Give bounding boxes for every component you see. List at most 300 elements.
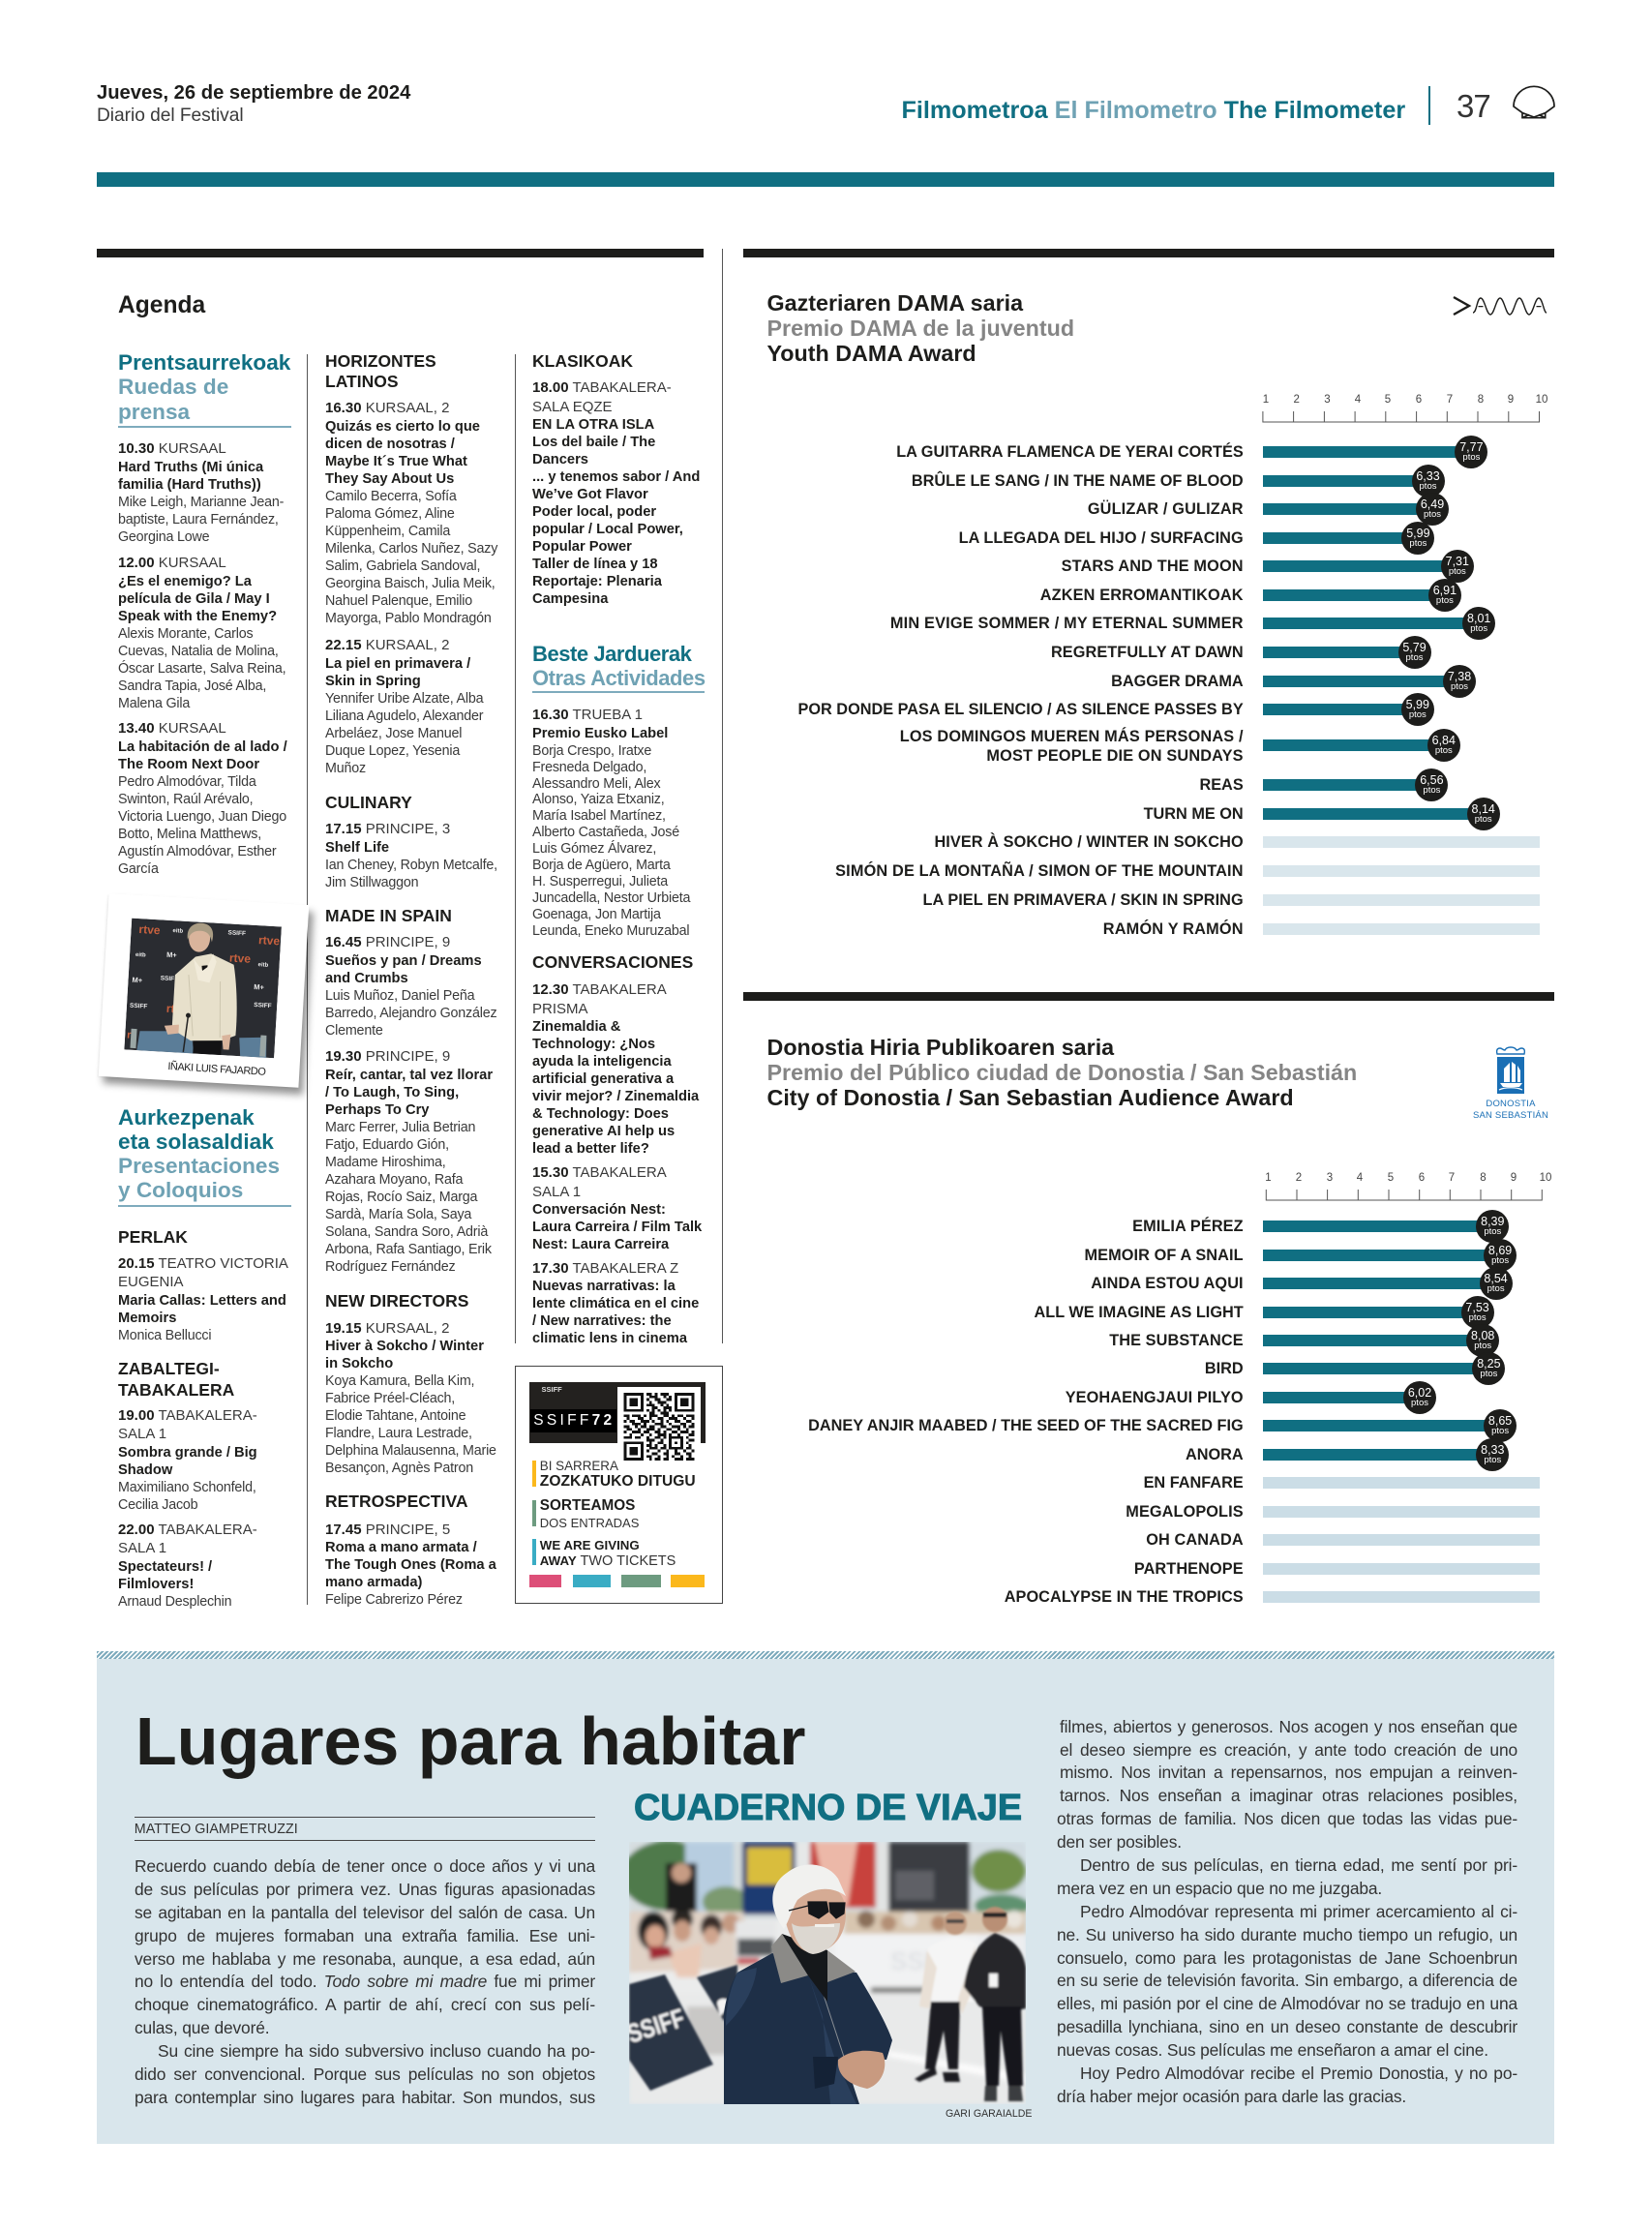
row: Regretfully at dawn: ptos <box>1406 652 1423 663</box>
agenda entry: 12.00: Sandra Tapia, José Alba, <box>118 678 266 694</box>
column separators <box>307 354 516 1605</box>
agenda entry: eusko label: Premio Eusko Label <box>532 726 668 741</box>
agenda entry: 19.15: in Sokcho <box>325 1356 393 1371</box>
agenda entry: 17.30: climatic lens in cinema <box>532 1331 687 1346</box>
agenda entry: 17.15: Shelf Life <box>325 840 389 856</box>
agenda entry: 16.30: Paloma Gómez, Aline <box>325 506 455 522</box>
article text column 1 <box>135 1855 595 2110</box>
agenda entry: 16.45: 16.45 PRINCIPE, 9 <box>325 934 450 950</box>
row: Regretfully at dawn <box>755 636 1554 669</box>
row: La guitarra flamenca: 7,77 <box>1459 440 1484 454</box>
agenda entry: 16.30: Salim, Gabriela Sandoval, <box>325 558 480 574</box>
chart axis: 5 <box>1388 1172 1394 1184</box>
agenda entry: 13.40: Agustín Almodóvar, Esther <box>118 844 276 859</box>
agenda entry: eusko label <box>532 707 691 939</box>
row: Emilia Pérez: 8,39 <box>1481 1215 1504 1228</box>
photo: woman at press wall: M+ <box>254 982 264 991</box>
photo: woman at press wall: SSIFF <box>254 1002 271 1010</box>
colour swatches <box>529 1575 705 1587</box>
agenda entry: 18.00: 18.00 TABAKALERA- <box>532 379 672 396</box>
heading: presentations <box>118 1105 280 1202</box>
agenda entry: 19.30: Reír, cantar, tal vez llorar <box>325 1068 493 1083</box>
agenda entry: 20.15 <box>118 1255 288 1343</box>
row: Megalopolis: MEGALOPOLIS <box>1126 1503 1244 1521</box>
photo: woman at press wall: SSIFF <box>129 1002 147 1010</box>
row: Ainda estou aqui: ptos <box>1487 1283 1505 1294</box>
agenda entry: 19.30: Azahara Moyano, Rafa <box>325 1172 463 1188</box>
agenda entry: 19.15: Koya Kamura, Bella Kim, <box>325 1373 474 1389</box>
article text column 1: Recuerdo cuando debía de tener once o doce años y vi una <box>135 1856 595 1876</box>
row: Turn me on: TURN ME ON <box>1144 805 1244 823</box>
row: Ainda estou aqui: AINDA ESTOU AQUI <box>1091 1275 1244 1292</box>
article text column 2: otras formas de familia. Nos dicen que todas las vidas pue- <box>1057 1809 1517 1828</box>
agenda entry: 12.30: PRISMA <box>532 1001 588 1017</box>
agenda entry: 17.45 <box>325 1522 496 1608</box>
row: Turn me on: ptos <box>1475 814 1492 825</box>
hands <box>838 2051 885 2089</box>
row: Los domingos mueren más personas: ptos <box>1435 745 1453 756</box>
agenda entry: 16.30: Mayorga, Pablo Mondragón <box>325 611 492 626</box>
agenda entry: eusko label: Leunda, Eneko Muruzabal <box>532 923 689 939</box>
white hair <box>772 1864 846 1929</box>
agenda entry: 19.00: Sombra grande / Big <box>118 1444 257 1460</box>
agenda entry: 16.30: Küppenheim, Camila <box>325 524 450 539</box>
article headline: Lugares para habitar <box>135 1703 805 1779</box>
agenda entry: 19.30: Solana, Sandra Soro, Adrià <box>325 1224 488 1240</box>
agenda heading: Agenda <box>118 292 205 317</box>
chart axis: 3 <box>1324 394 1331 406</box>
row: All we imagine as light <box>755 1296 1554 1329</box>
agenda entry: 18.00: Dancers <box>532 452 588 467</box>
callout: ticket giveaway <box>515 1366 723 1604</box>
row: Azken erromantikoak: AZKEN ERROMANTIKOAK <box>1040 587 1244 604</box>
agenda entry: 20.15: EUGENIA <box>118 1274 184 1290</box>
agenda entry: 13.40: Victoria Luengo, Juan Diego <box>118 809 286 825</box>
award title <box>766 290 1074 366</box>
article text column 2: dría haber mejor ocasión para darle las gracias. <box>1057 2087 1406 2106</box>
article text column 2: Hoy Pedro Almodóvar recibe el Premio Donostia, y no po- <box>1080 2064 1517 2083</box>
agenda entry: 19.30: Arbona, Rafa Santiago, Erik <box>325 1242 492 1257</box>
heading: made in spain: MADE IN SPAIN <box>325 906 452 925</box>
heading: other activities <box>532 641 706 690</box>
row: Brûle le sang: BRÛLE LE SANG / IN THE NAME OF BLOOD <box>912 472 1244 490</box>
row: Ainda estou aqui: 8,54 <box>1484 1272 1508 1285</box>
row: Min evige sommer: MIN EVIGE SOMMER / MY ETERNAL SUMMER <box>890 615 1244 632</box>
row: Min evige sommer: ptos <box>1470 623 1487 634</box>
agenda entry: 22.00: SALA 1 <box>118 1540 166 1556</box>
barrier with SSIFF <box>624 1965 737 2091</box>
photo credit: GARI GARAIALDE <box>946 2108 1032 2120</box>
turtleneck <box>782 1934 827 2002</box>
row: Regretfully at dawn: 5,79 <box>1402 641 1427 654</box>
agenda entry: 19.00: Maximiliano Schonfeld, <box>118 1479 256 1494</box>
agenda entry: 16.30: Maybe It´s True What <box>325 454 467 469</box>
article text column 1: de sus películas por primera vez. Unas figuras apasionadas <box>135 1880 595 1899</box>
panel: article Lugares para habitar <box>97 1651 1554 2144</box>
row: Stars and the moon: ptos <box>1449 566 1466 577</box>
row: La llegada del hijo: 5,99 <box>1406 527 1430 540</box>
row: All we imagine as light: ptos <box>1469 1312 1487 1323</box>
agenda entry: 13.40: La habitación de al lado / <box>118 739 287 755</box>
photo: woman at press wall: eitb <box>135 951 146 958</box>
agenda entry: eusko label: Borja de Agüero, Marta <box>532 858 671 873</box>
row: Bird <box>755 1352 1554 1385</box>
ssiff 72 label <box>530 1409 616 1432</box>
agenda entry: 22.15 <box>325 637 484 776</box>
heading: other activities: Beste Jarduerak <box>532 641 691 666</box>
agenda entry: 19.30: Fatjo, Eduardo Gión, <box>325 1137 449 1153</box>
row: En fanfare <box>755 1466 1554 1499</box>
agenda entry: 16.30: Camilo Becerra, Sofía <box>325 489 457 504</box>
agenda entry: 12.30: lead a better life? <box>532 1141 649 1157</box>
heading: presentations: Aurkezpenak <box>118 1105 255 1130</box>
page header <box>97 82 1555 187</box>
heading: new directors: NEW DIRECTORS <box>325 1291 468 1311</box>
agenda entry: 16.30: Milenka, Carlos Nuñez, Sazy <box>325 541 497 557</box>
agenda entry: 10.30: baptiste, Laura Fernández, <box>118 512 279 527</box>
agenda entry: 16.45: and Crumbs <box>325 970 408 985</box>
article text column 2: Dentro de sus películas, en tierna edad, me sentí por pri- <box>1080 1855 1517 1875</box>
row: La guitarra flamenca: ptos <box>1462 452 1480 463</box>
heading: other activities: Otras Actividades <box>532 666 706 690</box>
chart axis: 7 <box>1449 1172 1455 1184</box>
agenda entry: 12.30: vivir mejor? / Zinemaldia <box>532 1089 699 1104</box>
dark banner <box>528 1382 705 1443</box>
agenda entry: 13.40: Pedro Almodóvar, Tilda <box>118 774 256 790</box>
page number: 37 <box>1457 88 1490 124</box>
agenda entry: 13.40: 13.40 KURSAAL <box>118 720 226 737</box>
heading: conversaciones: CONVERSACIONES <box>532 952 693 972</box>
article text column 2 <box>1057 1716 1517 2109</box>
chart axis: 3 <box>1327 1172 1333 1184</box>
chart axis: 6 <box>1419 1172 1425 1184</box>
photo credit: IÑAKI LUIS FAJARDO <box>167 1061 265 1078</box>
agenda entry: 18.00: Taller de línea y 18 <box>532 557 658 572</box>
agenda entry: 18.00 <box>532 379 700 607</box>
rule under presentations <box>118 1204 290 1206</box>
agenda entry: 16.30 <box>325 400 497 626</box>
green tab <box>532 1500 536 1526</box>
row: Brûle le sang <box>755 465 1554 497</box>
agenda entry: 12.30: generative AI help us <box>532 1124 675 1139</box>
agenda entry: 12.30: 12.30 TABAKALERA <box>532 981 667 998</box>
jacket <box>724 1953 892 2104</box>
row: Hiver à Sokcho <box>755 826 1554 859</box>
heading: presentations: Presentaciones <box>118 1154 280 1178</box>
row: Anora <box>755 1438 1554 1471</box>
agenda entry: 19.15: Besançon, Agnès Patron <box>325 1461 473 1476</box>
row: Apocalypse in the tropics <box>755 1581 1554 1613</box>
agenda entry: 19.30: Rodríguez Fernández <box>325 1259 455 1275</box>
row: Anora: ptos <box>1484 1455 1501 1465</box>
row: Ramón y Ramón <box>755 913 1554 946</box>
spanish text: SORTEAMOS <box>540 1497 635 1514</box>
date: Jueves, 26 de septiembre de 2024 <box>97 82 410 104</box>
agenda entry: 12.00: Speak with the Enemy? <box>118 609 277 624</box>
agenda entry: 19.15: 19.15 KURSAAL, 2 <box>325 1320 449 1336</box>
article text column 2: den ser posibles. <box>1057 1832 1182 1852</box>
chart axis: 9 <box>1508 394 1514 406</box>
row: Reas: 6,56 <box>1420 773 1444 787</box>
agenda entry: eusko label: Alberto Castañeda, José <box>532 825 679 840</box>
festival small logo: SSIFF <box>542 1385 562 1394</box>
heading: press conferences <box>118 350 290 424</box>
agenda entry: 20.15: Memoirs <box>118 1311 176 1326</box>
agenda entry: 19.00: Cecilia Jacob <box>118 1496 197 1512</box>
agenda entry: 19.30: Sardà, María Sola, Saya <box>325 1207 471 1222</box>
row: Azken erromantikoak: 6,91 <box>1433 584 1457 597</box>
article text column 2: consuelo, como para les protagonistas de Jane Schoenbrun <box>1057 1948 1517 1968</box>
row: Regretfully at dawn: REGRETFULLY AT DAWN <box>1051 644 1244 661</box>
agenda entry: 13.40: García <box>118 861 159 877</box>
row: Gülizar: GÜLIZAR / GULIZAR <box>1088 500 1244 518</box>
row: Daney anjir maabed: 8,65 <box>1488 1414 1512 1428</box>
agenda entry: 17.45: 17.45 PRINCIPE, 5 <box>325 1522 450 1537</box>
agenda entry: 19.15: Hiver à Sokcho / Winter <box>325 1339 484 1354</box>
agenda entry: 15.30: Conversación Nest: <box>532 1202 666 1218</box>
panel top rule <box>743 992 1554 1001</box>
row: La piel en primavera: LA PIEL EN PRIMAVERA / SKIN IN SPRING <box>923 891 1244 909</box>
agenda entry: 19.30: Rojas, Rocío Saiz, Marga <box>325 1190 477 1205</box>
chart axis: 8 <box>1478 394 1484 406</box>
heading: perlak: PERLAK <box>118 1227 188 1247</box>
agenda entry: 17.15: Ian Cheney, Robyn Metcalfe, <box>325 858 497 873</box>
heading: presentations: eta solasaldiak <box>118 1130 274 1154</box>
photo: woman at press wall <box>124 918 282 1059</box>
agenda entry: eusko label: Borja Crespo, Iratxe <box>532 743 651 759</box>
article text column 2: el deseo siempre es creación, y ante todo creación de uno <box>1060 1740 1517 1760</box>
agenda entry: 17.30: / New narratives: the <box>532 1313 672 1329</box>
chart axis: 4 <box>1357 1172 1364 1184</box>
photo: woman at press wall: rtve <box>228 950 251 965</box>
agenda entry: 17.15: 17.15 PRINCIPE, 3 <box>325 821 450 837</box>
ssiff 72 label: SSIFF72 <box>533 1412 615 1429</box>
agenda entry: 10.30: Georgina Lowe <box>118 529 209 545</box>
agenda entry: eusko label: Juncadella, Nestor Urbieta <box>532 890 690 906</box>
english text: AWAY TWO TICKETS <box>540 1553 676 1569</box>
photo: Pedro Almodóvar on the red carpet: SSIF <box>890 1946 946 1975</box>
agenda entry: 22.15: 22.15 KURSAAL, 2 <box>325 637 449 653</box>
row: Simón de la montaña <box>755 855 1554 888</box>
panel top rule <box>743 249 1554 257</box>
article text column 2: mismo. Nos invitan a repensarnos, nos empujan a reinven- <box>1060 1763 1517 1782</box>
row: Yeohaengjaui pilyo: YEOHAENGJAUI PILYO <box>1066 1389 1244 1406</box>
agenda entry: 18.00: popular / Local Power, <box>532 522 683 537</box>
checked collar <box>771 1934 856 1983</box>
row: Stars and the moon: 7,31 <box>1446 555 1469 568</box>
agenda entry: 18.00: Reportaje: Plenaria <box>532 574 662 589</box>
agenda entry: 19.00 <box>118 1407 257 1512</box>
row: Azken erromantikoak <box>755 579 1554 612</box>
chart axis <box>1253 1161 1555 1204</box>
agenda entry: 17.45: Roma a mano armata / <box>325 1540 477 1555</box>
article text column 2: ne. Su universo ha sido durante mucho tiempo un refugio, un <box>1057 1925 1517 1944</box>
agenda entry: 18.00: Popular Power <box>532 539 632 555</box>
agenda entry: 12.30: artificial generativa a <box>532 1071 674 1087</box>
agenda entry: 12.30: Technology: ¿Nos <box>532 1037 655 1052</box>
agenda entry: 16.30: Nahuel Palenque, Emilio <box>325 593 472 609</box>
chart axis: 5 <box>1385 394 1391 406</box>
award title: City of Donostia / San Sebastian Audience Award <box>766 1085 1294 1110</box>
agenda entry: 12.00: 12.00 KURSAAL <box>118 555 226 571</box>
row: La llegada del hijo <box>755 522 1554 555</box>
row: Apocalypse in the tropics: APOCALYPSE IN THE TROPICS <box>1005 1588 1244 1606</box>
agenda entry: 22.15: Liliana Agudelo, Alexander <box>325 708 483 724</box>
article text column 1: choque cinematográfico. A partir de ahí, crecí con sus pelí- <box>135 1995 595 2014</box>
agenda entry: 12.00: Óscar Lasarte, Salva Reina, <box>118 661 285 677</box>
chart axis: 8 <box>1480 1172 1487 1184</box>
award title: Premio DAMA de la juventud <box>766 316 1074 341</box>
row: Reas: ptos <box>1423 785 1440 796</box>
agenda entry: 19.15 <box>325 1320 496 1476</box>
row: Emilia Pérez <box>755 1210 1554 1243</box>
row: La llegada del hijo: ptos <box>1409 538 1427 549</box>
photo: woman at press wall: SSIF <box>160 975 174 982</box>
agenda entry: 17.45: The Tough Ones (Roma a <box>325 1557 496 1573</box>
section label: CUADERNO DE VIAJE <box>634 1788 1022 1828</box>
byline <box>135 1817 595 1841</box>
row: En fanfare: EN FANFARE <box>1144 1474 1244 1492</box>
rule under other activities <box>532 691 705 693</box>
row: Daney anjir maabed <box>755 1409 1554 1442</box>
row: Oh Canada <box>755 1523 1554 1556</box>
agenda entry: 16.45: Clemente <box>325 1022 383 1038</box>
agenda entry: eusko label: Fresneda Delgado, <box>532 760 646 775</box>
row: Azken erromantikoak: ptos <box>1436 595 1454 606</box>
row: The substance: 8,08 <box>1471 1329 1494 1342</box>
row: La llegada del hijo: LA LLEGADA DEL HIJO / SURFACING <box>959 529 1244 547</box>
row: Los domingos mueren más personas: 6,84 <box>1432 734 1456 747</box>
row: Memoir of a snail: MEMOIR OF A SNAIL <box>1084 1247 1244 1264</box>
agenda entry: 22.00: 22.00 TABAKALERA- <box>118 1522 257 1537</box>
article text column 1: verso me hablaba y me resonaba, aunque, a esa edad, aún <box>135 1949 595 1969</box>
row: Turn me on <box>755 798 1554 830</box>
agenda entry: 22.15: La piel en primavera / <box>325 656 470 672</box>
photo: woman at press wall: rtve <box>138 922 161 937</box>
row: Bagger drama <box>755 664 1554 697</box>
row: The substance: THE SUBSTANCE <box>1109 1332 1244 1349</box>
agenda entry: 22.15: Yennifer Uribe Alzate, Alba <box>325 691 483 707</box>
bar chart rows <box>797 436 1540 938</box>
blue tab <box>532 1539 536 1564</box>
agenda entry: 15.30 <box>532 1164 703 1252</box>
icon: shell logo <box>1513 85 1555 118</box>
agenda entry: 17.30: Nuevas narrativas: la <box>532 1279 676 1294</box>
agenda entry: 22.15: Skin in Spring <box>325 674 421 689</box>
logo wordmark <box>1471 1099 1550 1121</box>
icon: Donostia city logo <box>1471 1045 1550 1121</box>
heading: zabaltegi <box>118 1359 234 1400</box>
row: Por donde pasa el silencio: 5,99 <box>1406 698 1429 711</box>
agenda entry: 20.15: Maria Callas: Letters and <box>118 1293 286 1309</box>
row: Reas <box>755 768 1554 801</box>
agenda entry: 18.00: Los del baile / The <box>532 435 655 450</box>
row: All we imagine as light: 7,53 <box>1465 1301 1489 1314</box>
agenda entry: 17.15 <box>325 821 497 890</box>
spanish text <box>540 1497 639 1530</box>
row: Parthenope <box>755 1552 1554 1585</box>
agenda entry: 19.30: Perhaps To Cry <box>325 1102 429 1118</box>
agenda entry: 13.40: Swinton, Raúl Arévalo, <box>118 792 253 807</box>
agenda entry: 13.40: The Room Next Door <box>118 757 259 772</box>
agenda entry: 12.30: ayuda la inteligencia <box>532 1054 672 1070</box>
row: La piel en primavera <box>755 884 1554 917</box>
article text column 1: se agitaban en la pantalla del televisor del salón de casa. Un <box>135 1903 595 1922</box>
sunglasses <box>789 1902 845 1918</box>
teal header band <box>97 172 1554 187</box>
agenda entry: 19.30 <box>325 1048 493 1275</box>
chart axis: 9 <box>1511 1172 1517 1184</box>
agenda entry: 20.15: 20.15 TEATRO VICTORIA <box>118 1255 288 1272</box>
spanish text: DOS ENTRADAS <box>540 1516 639 1530</box>
chart axis: 1 <box>1263 394 1269 406</box>
row: Bird: BIRD <box>1205 1360 1244 1377</box>
agenda entry: 20.15: Monica Bellucci <box>118 1328 211 1343</box>
row: Ainda estou aqui <box>755 1267 1554 1300</box>
chart axis: 2 <box>1293 394 1300 406</box>
chart axis: 2 <box>1296 1172 1302 1184</box>
agenda entry: 12.00: ¿Es el enemigo? La <box>118 574 252 589</box>
agenda entry: eusko label: Luis Gómez Álvarez, <box>532 841 656 857</box>
article text column 1: dido ser convencional. Porque sus películas no son objetos <box>135 2064 595 2084</box>
byline: MATTEO GIAMPETRUZZI <box>135 1822 298 1837</box>
photo: woman at press wall: eitb <box>172 928 183 934</box>
agenda entry: 12.30: Zinemaldia & <box>532 1019 620 1035</box>
heading: press conferences: Ruedas de <box>118 375 228 399</box>
agenda entry: 12.00: película de Gila / May I <box>118 591 270 607</box>
row: Min evige sommer: 8,01 <box>1467 612 1490 625</box>
agenda entry: 22.00: Spectateurs! / <box>118 1558 212 1574</box>
agenda entry: 19.15: Flandre, Laura Lestrade, <box>325 1426 472 1441</box>
row: Simón de la montaña: SIMÓN DE LA MONTAÑA / SIMON OF THE MOUNTAIN <box>835 862 1244 880</box>
agenda entry: 19.15: Fabrice Préel-Cléach, <box>325 1391 455 1406</box>
row: Stars and the moon <box>755 550 1554 583</box>
basque text: BI SARRERA <box>540 1459 618 1473</box>
heading: horizontes latinos: LATINOS <box>325 372 399 391</box>
agenda entry: 16.30: Quizás es cierto lo que <box>325 419 480 435</box>
row: Bird: 8,25 <box>1477 1357 1501 1371</box>
article text column 2: mera vez en un espacio que no me juzgaba. <box>1057 1879 1382 1898</box>
english text <box>540 1537 676 1569</box>
agenda entry: 19.30: 19.30 PRINCIPE, 9 <box>325 1048 450 1065</box>
agenda entry: eusko label: 16.30 TRUEBA 1 <box>532 707 643 723</box>
row: La guitarra flamenca <box>896 436 1487 468</box>
agenda entry: 17.30: 17.30 TABAKALERA Z <box>532 1260 678 1277</box>
agenda entry: eusko label: Alonso, Yaiza Etxaniz, <box>532 792 665 807</box>
basque text <box>540 1459 696 1490</box>
agenda entry: eusko label: Alessandro Meli, Alex <box>532 776 660 792</box>
article text column 2: nuevas cosas. Sus películas me enseñaron a amar el cine. <box>1057 2040 1488 2060</box>
article text column 2: pesadilla lynchiana, sino en un deseo constante de descubrir <box>1057 2017 1517 2036</box>
qr code <box>617 1387 701 1461</box>
row: Brûle le sang: 6,33 <box>1416 469 1440 483</box>
award title: Gazteriaren DAMA saria <box>766 290 1023 316</box>
row: Bagger drama: ptos <box>1451 681 1468 691</box>
row: The substance: ptos <box>1474 1341 1491 1351</box>
agenda entry: 22.15: Duque Lopez, Yesenia <box>325 743 460 759</box>
agenda entry: 12.30 <box>532 981 699 1157</box>
heading: zabaltegi: ZABALTEGI- <box>118 1359 220 1378</box>
row: Reas: REAS <box>1199 776 1244 794</box>
row: La guitarra flamenca: LA GUITARRA FLAMENCA DE YERAI CORTÉS <box>896 443 1244 461</box>
heading: presentations: y Coloquios <box>118 1178 243 1202</box>
chart axis: 4 <box>1355 394 1362 406</box>
agenda entry: 19.00: Shadow <box>118 1462 172 1477</box>
heading: horizontes latinos <box>325 350 436 391</box>
english text: WE ARE GIVING <box>540 1537 640 1552</box>
row: Emilia Pérez: ptos <box>1484 1226 1501 1237</box>
panel: city of Donostia audience award <box>743 992 1554 1616</box>
